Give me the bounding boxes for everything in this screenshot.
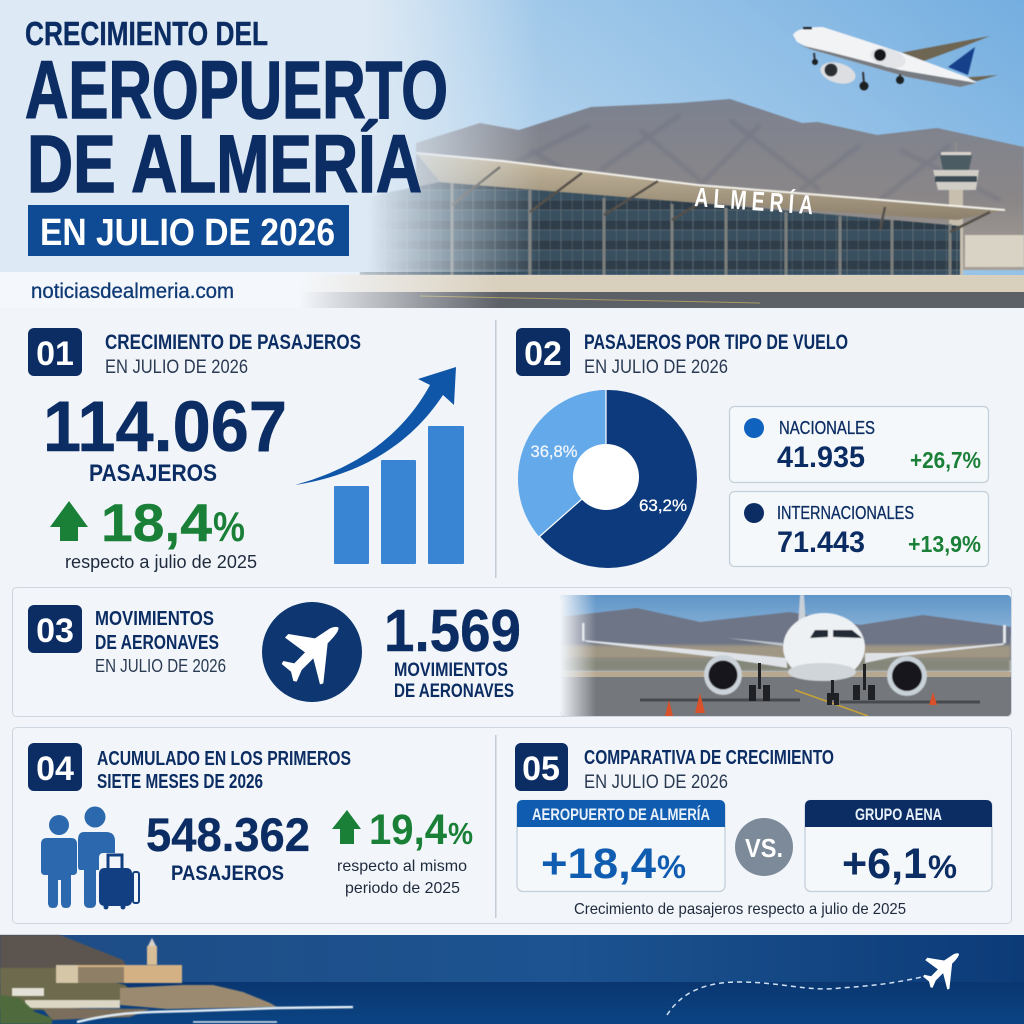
date banner: EN JULIO DE 2026 (40, 212, 335, 254)
airplane fuselage (783, 613, 865, 681)
comparison caption: Crecimiento de pasajeros respecto a julio de 2025 (574, 901, 906, 918)
card: nacionales: +26,7% (910, 447, 981, 473)
footer vegetation (0, 995, 52, 1024)
hero terminal sign: ALMERÍA (694, 181, 819, 220)
photo: parked airplane (560, 595, 1011, 717)
panel 05: growth comparison (515, 743, 992, 918)
icon: green up arrow (50, 501, 88, 541)
badge 02: 02 (524, 335, 562, 373)
card: Almería airport: +18,4 (541, 840, 656, 888)
card: internacionales: 71.443 (777, 526, 865, 559)
badge 04: 04 (36, 750, 74, 788)
icon: airplane in circle (262, 602, 362, 702)
icon: green arrow (332, 810, 361, 844)
title line 2: AEROPUERTO (25, 45, 448, 136)
badge 04 (28, 743, 82, 791)
comparison note: respecto a julio de 2025 (65, 552, 257, 572)
accumulated note: periodo de 2025 (345, 880, 460, 897)
card: nacionales: 41.935 (777, 441, 865, 474)
hero terminal (360, 153, 1005, 275)
panel frame 04 and 05 (12, 728, 1012, 924)
icon: footer airplane (923, 953, 959, 989)
movements label: MOVIMIENTOS (394, 660, 508, 681)
footer fortress (56, 965, 182, 983)
accumulated total: 548.362 (146, 808, 310, 861)
badge 03 (28, 605, 82, 653)
hero side building (965, 235, 1024, 267)
footer cliff (0, 935, 130, 972)
heading 02 (584, 331, 848, 378)
title line 1: CRECIMIENTO DEL (25, 15, 268, 52)
heading 01: CRECIMIENTO DE PASAJEROS (105, 331, 361, 354)
heading 04: SIETE MESES DE 2026 (97, 771, 263, 793)
hero airplane (793, 27, 998, 90)
panel 02: passengers by flight type (516, 328, 988, 568)
heading 03: EN JULIO DE 2026 (95, 656, 226, 676)
vertical divider lower (495, 735, 496, 918)
footer sky (0, 935, 1024, 982)
movements label (394, 660, 514, 702)
hero sky (0, 0, 1024, 308)
hero mountains (416, 99, 1024, 270)
card: Almería airport: % (657, 849, 686, 885)
growth percentage: % (213, 503, 245, 550)
hero left fade (0, 0, 540, 272)
donut chart (518, 390, 697, 568)
hero website strip background (0, 272, 500, 308)
panel: hero header (0, 0, 1024, 308)
accumulated label: PASAJEROS (171, 862, 284, 885)
card: internacionales (730, 492, 988, 566)
panel: footer coastal scene (0, 935, 1024, 1024)
card: Almería airport: AEROPUERTO DE ALMERÍA (532, 805, 710, 824)
passenger label: PASAJEROS (89, 460, 217, 487)
photo left fade (560, 595, 596, 717)
airplane landing gear (749, 663, 875, 705)
badge 01 (28, 328, 82, 376)
card: Grupo Aena: % (928, 849, 957, 885)
donut chart: 63,2% (639, 496, 687, 515)
airplane engines (704, 655, 927, 696)
panel 01: passenger growth (28, 328, 464, 572)
card: Grupo Aena (805, 800, 992, 892)
heading 04 (97, 748, 351, 793)
card: Grupo Aena: +6,1 (842, 840, 927, 888)
card: nacionales: NACIONALES (779, 418, 875, 438)
badge 05: 05 (522, 750, 560, 788)
hero apron and runway (0, 275, 1024, 292)
flight path (667, 977, 922, 1015)
heading 03: DE AERONAVES (95, 632, 219, 654)
accumulated growth: % (448, 816, 473, 851)
heading 05: COMPARATIVA DE CRECIMIENTO (584, 747, 834, 769)
footer hillside (0, 968, 140, 1010)
donut chart: 36,8% (530, 442, 578, 461)
heading 03 (95, 608, 226, 676)
heading 01: EN JULIO DE 2026 (105, 357, 248, 378)
badge 05 (515, 743, 568, 791)
website: noticiasdealmeria.com (31, 280, 234, 303)
movements label: DE AERONAVES (394, 681, 514, 702)
hero control tower (933, 142, 979, 275)
icon: travellers with suitcase (41, 806, 139, 910)
bar chart (334, 426, 464, 564)
airplane wings (582, 595, 1006, 668)
panel 03 frame (12, 588, 1012, 716)
passenger total: 114.067 (43, 388, 287, 467)
card: Grupo Aena: GRUPO AENA (855, 806, 942, 824)
title (25, 15, 448, 210)
footer rocky headland (120, 985, 277, 1009)
heading 05: EN JULIO DE 2026 (584, 772, 728, 793)
vs badge (735, 818, 793, 876)
traffic cones (665, 692, 937, 716)
vertical divider (495, 320, 496, 578)
heading 01 (105, 331, 361, 378)
badge 01: 01 (36, 335, 74, 373)
accumulated note (337, 858, 467, 897)
movements total: 1.569 (384, 598, 521, 664)
heading 02: PASAJEROS POR TIPO DE VUELO (584, 331, 848, 354)
footer lighthouse (147, 938, 157, 965)
title line 3: DE ALMERÍA (27, 119, 422, 210)
card: internacionales: INTERNACIONALES (777, 503, 914, 523)
footer town (12, 988, 150, 1020)
growth percentage: 18,4 (101, 494, 213, 553)
growth arrow (295, 367, 456, 485)
panel 03: aircraft movements (12, 588, 1012, 717)
panel 04: accumulated (28, 743, 473, 910)
card: nacionales (730, 406, 988, 482)
vs badge: VS. (745, 833, 783, 863)
heading 04: ACUMULADO EN LOS PRIMEROS (97, 748, 351, 770)
badge 02 (516, 328, 570, 376)
heading 02: EN JULIO DE 2026 (584, 357, 728, 378)
card: internacionales: +13,9% (908, 531, 981, 557)
accumulated note: respecto al mismo (337, 858, 467, 875)
heading 03: MOVIMIENTOS (95, 608, 214, 630)
accumulated growth: 19,4 (369, 806, 447, 854)
footer waves (77, 1007, 353, 1022)
card: Almería airport (517, 800, 725, 892)
badge 03: 03 (36, 612, 74, 650)
footer sea (0, 982, 1024, 1024)
heading 05 (584, 747, 834, 793)
